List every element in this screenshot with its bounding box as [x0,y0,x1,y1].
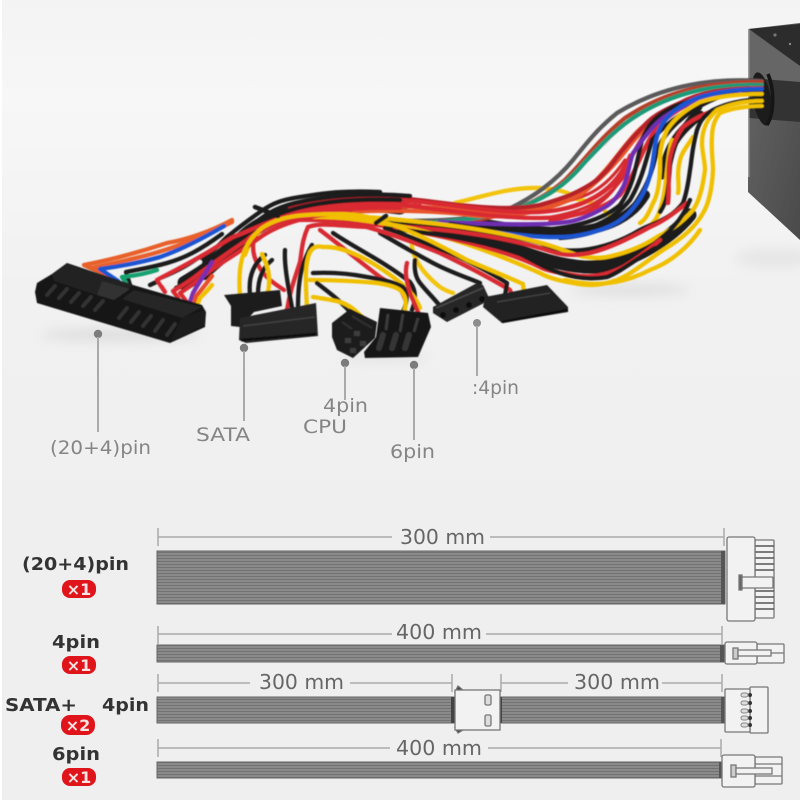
row: SATA and 4 pin cable [5,670,768,735]
row: 20+4 pin cable [22,525,774,621]
connector: second SATA [483,285,568,323]
cable ties [255,207,386,223]
label: SATA plus 4 pin: 4pin [102,695,149,716]
callout: SATA [196,344,250,446]
label: 4 pin: 4pin [52,632,100,653]
photo background [0,0,800,480]
ribbon cable first segment [157,697,455,723]
row: 6 pin cable [52,736,782,787]
upper bundle: grey, green, orange and red [285,80,762,223]
dimension 300 mm left: 300 mm [259,670,344,694]
callout: Molex 4 pin: :4pin [472,377,519,399]
hollow-centre red wires [545,155,630,221]
diagram background [0,480,800,800]
dark bundle underlays [185,115,700,283]
dimension 400 mm: 400 mm [396,620,482,644]
connector outline 6 pin [722,755,782,787]
ribbon cable [157,645,724,662]
quantity badge x2: ×2 [66,716,90,735]
label: 20+4 pin: (20+4)pin [22,554,129,575]
dimension 300 mm right [501,670,722,694]
callout: SATA: SATA [196,424,250,446]
left edge highlight [0,0,2,800]
fan-out wires to SATA, CPU, 6 pin and Molex [239,214,524,322]
ribbon cable [157,762,723,778]
quantity badge x1: ×1 [67,656,91,675]
cable grommet back [748,71,776,127]
dimension 300 mm [158,525,724,549]
soft shadows under the cables and connectors [40,248,800,361]
callout: Molex 4 pin [472,319,519,399]
dimension 400 mm: 400 mm [396,736,482,760]
wire harness [84,80,762,322]
inline Molex connector [455,686,500,733]
connector outline 4 pin [725,642,784,664]
connector: SATA pair [224,290,318,343]
callouts for the photo [50,319,519,463]
quantity badge x2 [61,715,95,735]
lower sweep wires [245,101,762,290]
connector outline 24 pin [727,537,774,621]
left bundle to the 24 pin connector [84,191,420,306]
dimension 300 mm left [158,670,452,694]
ribbon cable second segment [499,697,725,723]
label: SATA plus 4 pin: SATA+ [5,695,77,716]
callout: 6 pin [390,361,435,463]
label: SATA plus 4 pin [5,695,149,716]
connector: 4 pin CPU [332,309,377,358]
callout: 4 pin CPU: CPU [303,416,347,438]
yellow wires behind the main bundle [412,188,610,293]
connector: Molex 4 pin [433,283,490,322]
dimension 300 mm: 300 mm [400,525,485,549]
dimension 400 mm [158,620,722,644]
connector outline SATA [725,687,768,733]
connector: 24 pin ATX [35,263,206,343]
quantity badge x1: ×1 [67,768,91,787]
label: 6 pin: 6pin [52,744,100,765]
callout: 20+4 pin [50,330,151,459]
callout: 6 pin: 6pin [390,441,435,463]
quantity badge x1: ×1 [67,580,91,599]
connector: 6 pin [364,308,431,358]
callout: 20+4 pin: (20+4)pin [50,437,151,459]
ribbon cable [157,551,725,604]
pin cells [47,286,175,335]
cable grommet front edge [767,74,773,125]
row: 4 pin cable [52,620,784,675]
dimension 400 mm [158,736,721,760]
yellow and red inner wires [385,94,762,251]
callout: 4 pin CPU: 4pin [323,395,368,417]
power supply box [748,23,800,240]
purple, black and blue wires [400,89,762,238]
dimension 300 mm right: 300 mm [574,670,660,694]
callout: 4 pin CPU [303,359,368,438]
